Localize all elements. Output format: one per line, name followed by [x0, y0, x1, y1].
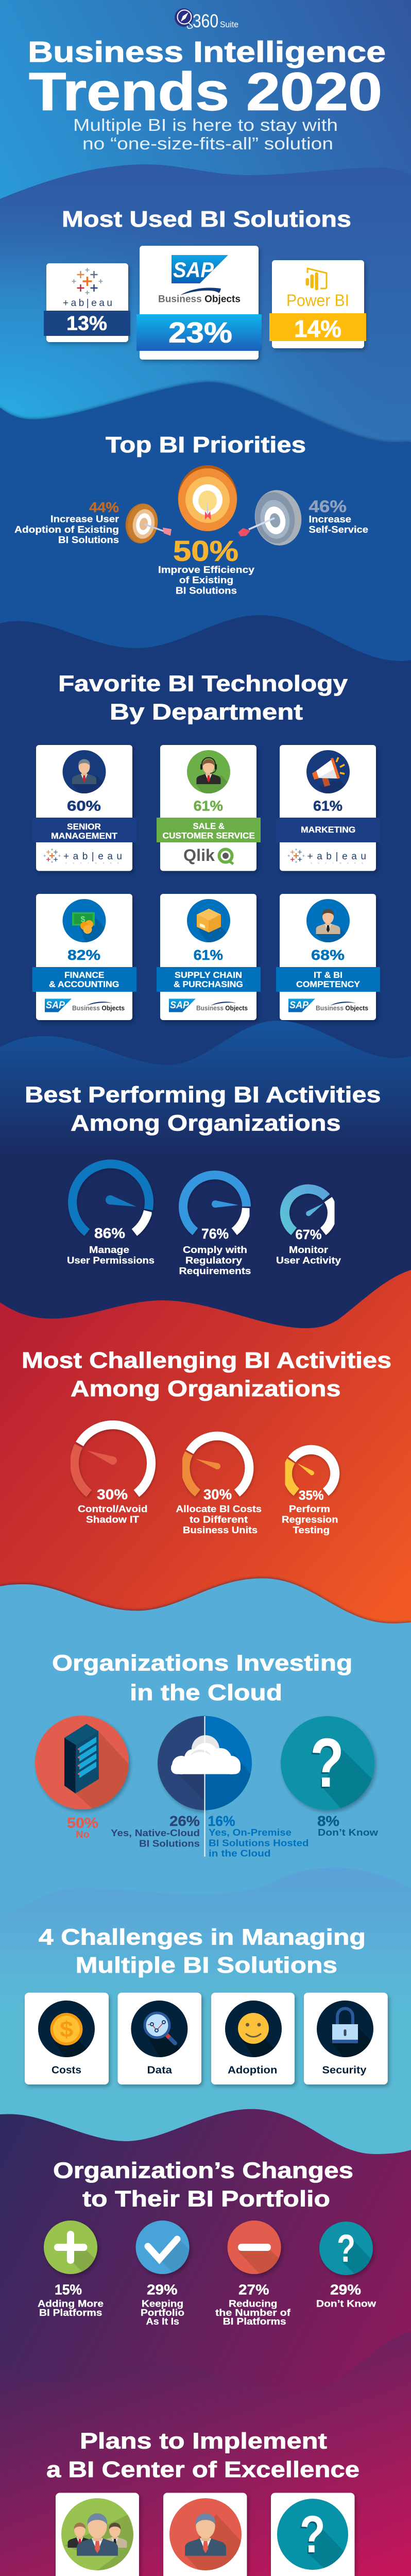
card: tableau: + a b | e a u: [63, 298, 112, 309]
heading: [25, 1082, 381, 1136]
card: costs: Costs: [52, 2064, 81, 2076]
card: senior management: MANAGEMENT: [51, 831, 118, 841]
gauge: 30% BI costs: [176, 1436, 262, 1535]
icon: cloud circle: [158, 1716, 258, 1857]
icon: check mark: [148, 2239, 177, 2259]
heading: Organization’s Changes: [53, 2158, 353, 2183]
icon: question mark: ?: [337, 2227, 355, 2270]
logo: 360Suite: [175, 8, 238, 31]
panel: BI center of excellence: [0, 2331, 411, 2576]
card: sale and customer service: 61%: [194, 798, 223, 814]
card: Power BI: [269, 260, 366, 348]
card: Power BI: Power BI: [286, 291, 349, 310]
title: Business Intelligence: [28, 36, 386, 69]
card: data: Data: [147, 2064, 173, 2076]
card: finance and accounting: 82%: [67, 947, 100, 963]
stat: 50% no: No: [76, 1829, 90, 1840]
card: yes: [56, 2493, 139, 2576]
heading: [53, 2158, 353, 2212]
stat: 44%: BI Solutions: [58, 535, 119, 545]
gauge: 76%: [179, 1175, 251, 1276]
card: supply chain and purchasing: 61%: [194, 947, 223, 963]
panel: best performing BI activities: [0, 1021, 411, 1340]
icon: person: [185, 2513, 226, 2556]
logo: SAP Business Objects: Business Objects: [316, 1005, 368, 1012]
item: reducing platforms: [215, 2221, 291, 2327]
logo: 360Suite: Suite: [220, 20, 238, 29]
item: adding platforms: BI Platforms: [39, 2308, 102, 2318]
card: IT and BI competency: COMPETENCY: [296, 979, 361, 989]
icon: plus: [54, 2244, 88, 2251]
icon: coin: [50, 2013, 82, 2045]
icon: magnifier with chart: [145, 2013, 175, 2043]
gauge: 30% shadow IT: [74, 1425, 151, 1525]
stat: 50% no: 50%: [67, 1815, 98, 1831]
logo: Qlik: [183, 846, 233, 865]
icon: minus: [238, 2244, 271, 2251]
heading: By Department: [110, 700, 303, 725]
heading: [39, 1925, 366, 1978]
gauge: 76%: Comply with: [183, 1245, 247, 1255]
card: SAP Business Objects: Business Objects: [158, 294, 241, 305]
logo: tableau: SOFTWARE: [311, 861, 363, 865]
icon: Power BI logo: [306, 268, 327, 290]
icon: team: [68, 2513, 127, 2556]
logo: SAP Business Objects: Business Objects: [196, 1005, 248, 1012]
heading: [46, 2429, 359, 2482]
stat: 44%: Increase User: [50, 514, 119, 524]
card: supply chain and purchasing: & PURCHASING: [174, 979, 243, 989]
card: senior management: SENIOR: [67, 822, 101, 832]
item: don't know: Don’t Know: [316, 2299, 376, 2309]
logo: SAP Business Objects: [288, 998, 368, 1012]
heading: Most Challenging BI Activities: [22, 1348, 391, 1373]
icon: money: $: [80, 915, 85, 924]
card: tableau: [44, 263, 130, 342]
card: finance and accounting: & ACCOUNTING: [49, 979, 119, 989]
card: adoption: [211, 1993, 295, 2084]
stat: 16% on-premise: [208, 1813, 309, 1859]
stat: 8% don't know: Don’t Know: [318, 1827, 379, 1838]
stat: 26% native cloud: BI Solutions: [139, 1839, 200, 1849]
heading: in the Cloud: [130, 1680, 282, 1705]
heading: Top BI Priorities: [106, 432, 306, 457]
heading: Among Organizations: [71, 1376, 341, 1401]
card: IT and BI competency: IT & BI: [314, 970, 342, 980]
logo: Qlik: Qlik: [183, 846, 215, 865]
card: sale and customer service: SALE &: [193, 821, 225, 831]
item: keeping portfolio: [136, 2221, 196, 2327]
card: SAP Business Objects: SAP: [173, 258, 214, 282]
heading: Most Used BI Solutions: [62, 207, 351, 232]
icon: right target: [238, 486, 306, 549]
card: senior management: [32, 745, 136, 871]
item: reducing platforms: the Number of: [215, 2308, 291, 2318]
item: keeping portfolio: Portfolio: [141, 2308, 184, 2318]
item: keeping portfolio: As It Is: [146, 2316, 179, 2327]
stat: 50%: [158, 535, 254, 596]
card: marketing: [276, 745, 380, 871]
logo: tableau: + a b | e a u: [307, 851, 366, 862]
item: adding platforms: Adding More: [38, 2299, 104, 2309]
subtitle: [73, 115, 338, 153]
card: don't know: [271, 2493, 355, 2576]
stat: 50%: BI Solutions: [176, 585, 237, 596]
stat: 8% don't know: [317, 1813, 379, 1838]
gauge: 35% regression testing: [282, 1450, 338, 1535]
logo: SAP Business Objects: SAP: [46, 1000, 65, 1011]
gauge: 30% BI costs: 30%: [203, 1486, 232, 1502]
card: costs: $: [60, 2017, 73, 2042]
heading: [52, 1651, 352, 1705]
card: IT and BI competency: [276, 894, 380, 1020]
panel: top BI priorities: [0, 382, 411, 670]
card: senior management: 60%: [67, 798, 101, 814]
card: security: Security: [322, 2064, 367, 2076]
stat: 26% native cloud: Yes, Native-Cloud: [111, 1828, 200, 1838]
logo: SAP Business Objects: SAP: [289, 1000, 309, 1011]
card: data: [117, 1993, 201, 2084]
stat: 50% no: [67, 1815, 98, 1840]
item: don't know: [316, 2222, 376, 2309]
icon: megaphone: [312, 757, 345, 787]
stat: 16% on-premise: Yes, On-Premise: [209, 1827, 292, 1838]
logo: tableau: SOFTWARE: [65, 861, 119, 865]
gauge: 30% BI costs: Allocate BI Costs: [176, 1504, 262, 1514]
item: reducing platforms: BI Platforms: [223, 2316, 286, 2327]
item: reducing platforms: 27%: [238, 2281, 269, 2298]
stat: 46%: Self-Service: [309, 524, 368, 535]
gauge: 76%: Regulatory: [185, 1255, 242, 1265]
heading: Plans to Implement: [80, 2429, 327, 2454]
stat: 50%: of Existing: [179, 575, 233, 585]
panel: 4 challenges: [0, 1868, 411, 2164]
icon: server circle: [35, 1716, 134, 1814]
stat: 16% on-premise: in the Cloud: [209, 1849, 271, 1859]
icon: padlock: [337, 2008, 353, 2024]
gauge: 76%: Requirements: [179, 1266, 251, 1276]
gauge: 86%: Manage: [89, 1245, 129, 1255]
panel: favorite BI technology by department: [0, 615, 411, 1082]
gauge: 86%: User Permissions: [67, 1255, 155, 1265]
gauge: 86%: [67, 1164, 155, 1265]
stat: 8% don't know: 8%: [317, 1813, 339, 1829]
card: SAP Business Objects: [136, 246, 262, 360]
gauge: 86%: 86%: [94, 1225, 125, 1241]
item: adding platforms: [38, 2221, 104, 2318]
heading: Multiple BI Solutions: [76, 1953, 337, 1978]
item: adding platforms: 15%: [55, 2281, 82, 2298]
gauge: 35% regression testing: Perform: [289, 1504, 330, 1514]
logo: tableau: [43, 849, 122, 865]
subtitle: Multiple BI is here to stay with: [73, 115, 338, 134]
card: supply chain and purchasing: SUPPLY CHAIN: [175, 970, 242, 980]
gauge: 67%: [276, 1189, 341, 1265]
gauge: 67%: 67%: [296, 1227, 321, 1242]
icon: SAP logo: [172, 255, 228, 283]
stat: 46%: 46%: [309, 497, 347, 516]
stat: 44%: 44%: [89, 499, 119, 515]
gauge: 30% shadow IT: 30%: [97, 1486, 128, 1502]
heading: Organizations Investing: [52, 1651, 352, 1676]
gauge: 30% shadow IT: Shadow IT: [86, 1515, 139, 1525]
panel: header: [28, 8, 386, 153]
stat: 50%: 50%: [173, 535, 238, 567]
card: no: [163, 2493, 247, 2576]
card: IT and BI competency: 68%: [311, 947, 345, 963]
heading: [22, 1348, 391, 1401]
card: tableau: 13%: [66, 312, 107, 335]
panel: most used BI solutions: [0, 164, 411, 453]
stat: 46%: Increase: [309, 514, 351, 524]
card: Power BI: 14%: [294, 315, 341, 342]
card: adoption: Adoption: [228, 2064, 277, 2076]
heading: [58, 671, 348, 725]
title: [28, 36, 386, 122]
card: security: [304, 1993, 388, 2084]
icon: agent with headset: [197, 757, 220, 784]
logo: SAP Business Objects: Business Objects: [72, 1005, 125, 1012]
logo: SAP Business Objects: [169, 998, 248, 1012]
title: Trends 2020: [29, 62, 382, 122]
heading: Best Performing BI Activities: [25, 1082, 381, 1108]
panel: most challenging BI activities: [0, 1270, 411, 1649]
gauge: 30% BI costs: Business Units: [183, 1525, 258, 1535]
stat: 44%: [14, 499, 119, 545]
heading: 4 Challenges in Managing: [39, 1925, 366, 1950]
stat: 50%: Improve Efficiency: [158, 565, 254, 575]
stat: 26% native cloud: [111, 1813, 200, 1849]
panel: BI portfolio changes: [0, 2109, 411, 2396]
subtitle: no “one-size-fits-all” solution: [82, 134, 333, 153]
icon: IT professional: [316, 909, 340, 934]
card: sale and customer service: [157, 745, 261, 871]
gauge: 35% regression testing: 35%: [299, 1488, 323, 1503]
stat: 44%: Adoption of Existing: [14, 524, 119, 535]
item: don't know: 29%: [330, 2281, 361, 2298]
card: marketing: 61%: [313, 798, 342, 814]
card: marketing: MARKETING: [301, 825, 355, 835]
icon: box: [197, 909, 221, 933]
card: costs: [25, 1993, 109, 2084]
gauge: 35% regression testing: Testing: [293, 1525, 330, 1535]
card: finance and accounting: FINANCE: [64, 970, 104, 980]
item: keeping portfolio: Keeping: [142, 2299, 183, 2309]
heading: a BI Center of Excellence: [46, 2457, 359, 2482]
stat: 46%: [309, 497, 368, 535]
logo: tableau: [287, 849, 366, 865]
heading: to Their BI Portfolio: [82, 2187, 330, 2212]
icon: center target: [178, 465, 237, 531]
icon: money: [72, 912, 95, 934]
panel: organizations investing in the cloud: [0, 1575, 411, 1917]
heading: Favorite BI Technology: [58, 671, 348, 697]
logo: SAP Business Objects: [45, 998, 125, 1012]
stat: 16% on-premise: 16%: [208, 1813, 235, 1829]
logo: tableau: + a b | e a u: [63, 851, 122, 862]
gauge: 67%: Monitor: [289, 1245, 328, 1255]
icon: question mark: ?: [300, 2505, 326, 2564]
item: keeping portfolio: 29%: [147, 2281, 178, 2298]
card: finance and accounting: [32, 894, 136, 1020]
logo: 360Suite: 360: [193, 10, 218, 31]
icon: smiley: [238, 2013, 269, 2044]
gauge: 76%: 76%: [201, 1226, 229, 1242]
item: reducing platforms: Reducing: [229, 2299, 277, 2309]
icon: manager: [72, 759, 96, 784]
icon: tableau logo: [72, 268, 103, 295]
card: supply chain and purchasing: [157, 894, 261, 1020]
icon: question circle: ?: [310, 1724, 344, 1802]
card: sale and customer service: CUSTOMER SERVICE: [163, 831, 255, 841]
gauge: 30% shadow IT: Control/Avoid: [78, 1504, 147, 1514]
gauge: 30% BI costs: to Different: [190, 1515, 248, 1525]
logo: SAP Business Objects: SAP: [170, 1000, 189, 1011]
card: SAP Business Objects: 23%: [168, 316, 232, 348]
stat: 26% native cloud: 26%: [169, 1813, 200, 1829]
gauge: 67%: User Activity: [276, 1255, 341, 1265]
gauge: 35% regression testing: Regression: [282, 1515, 338, 1525]
stat: 16% on-premise: BI Solutions Hosted: [209, 1838, 309, 1849]
heading: Among Organizations: [71, 1111, 341, 1136]
icon: left target: [123, 501, 172, 546]
icon: question circle: [281, 1716, 376, 1814]
